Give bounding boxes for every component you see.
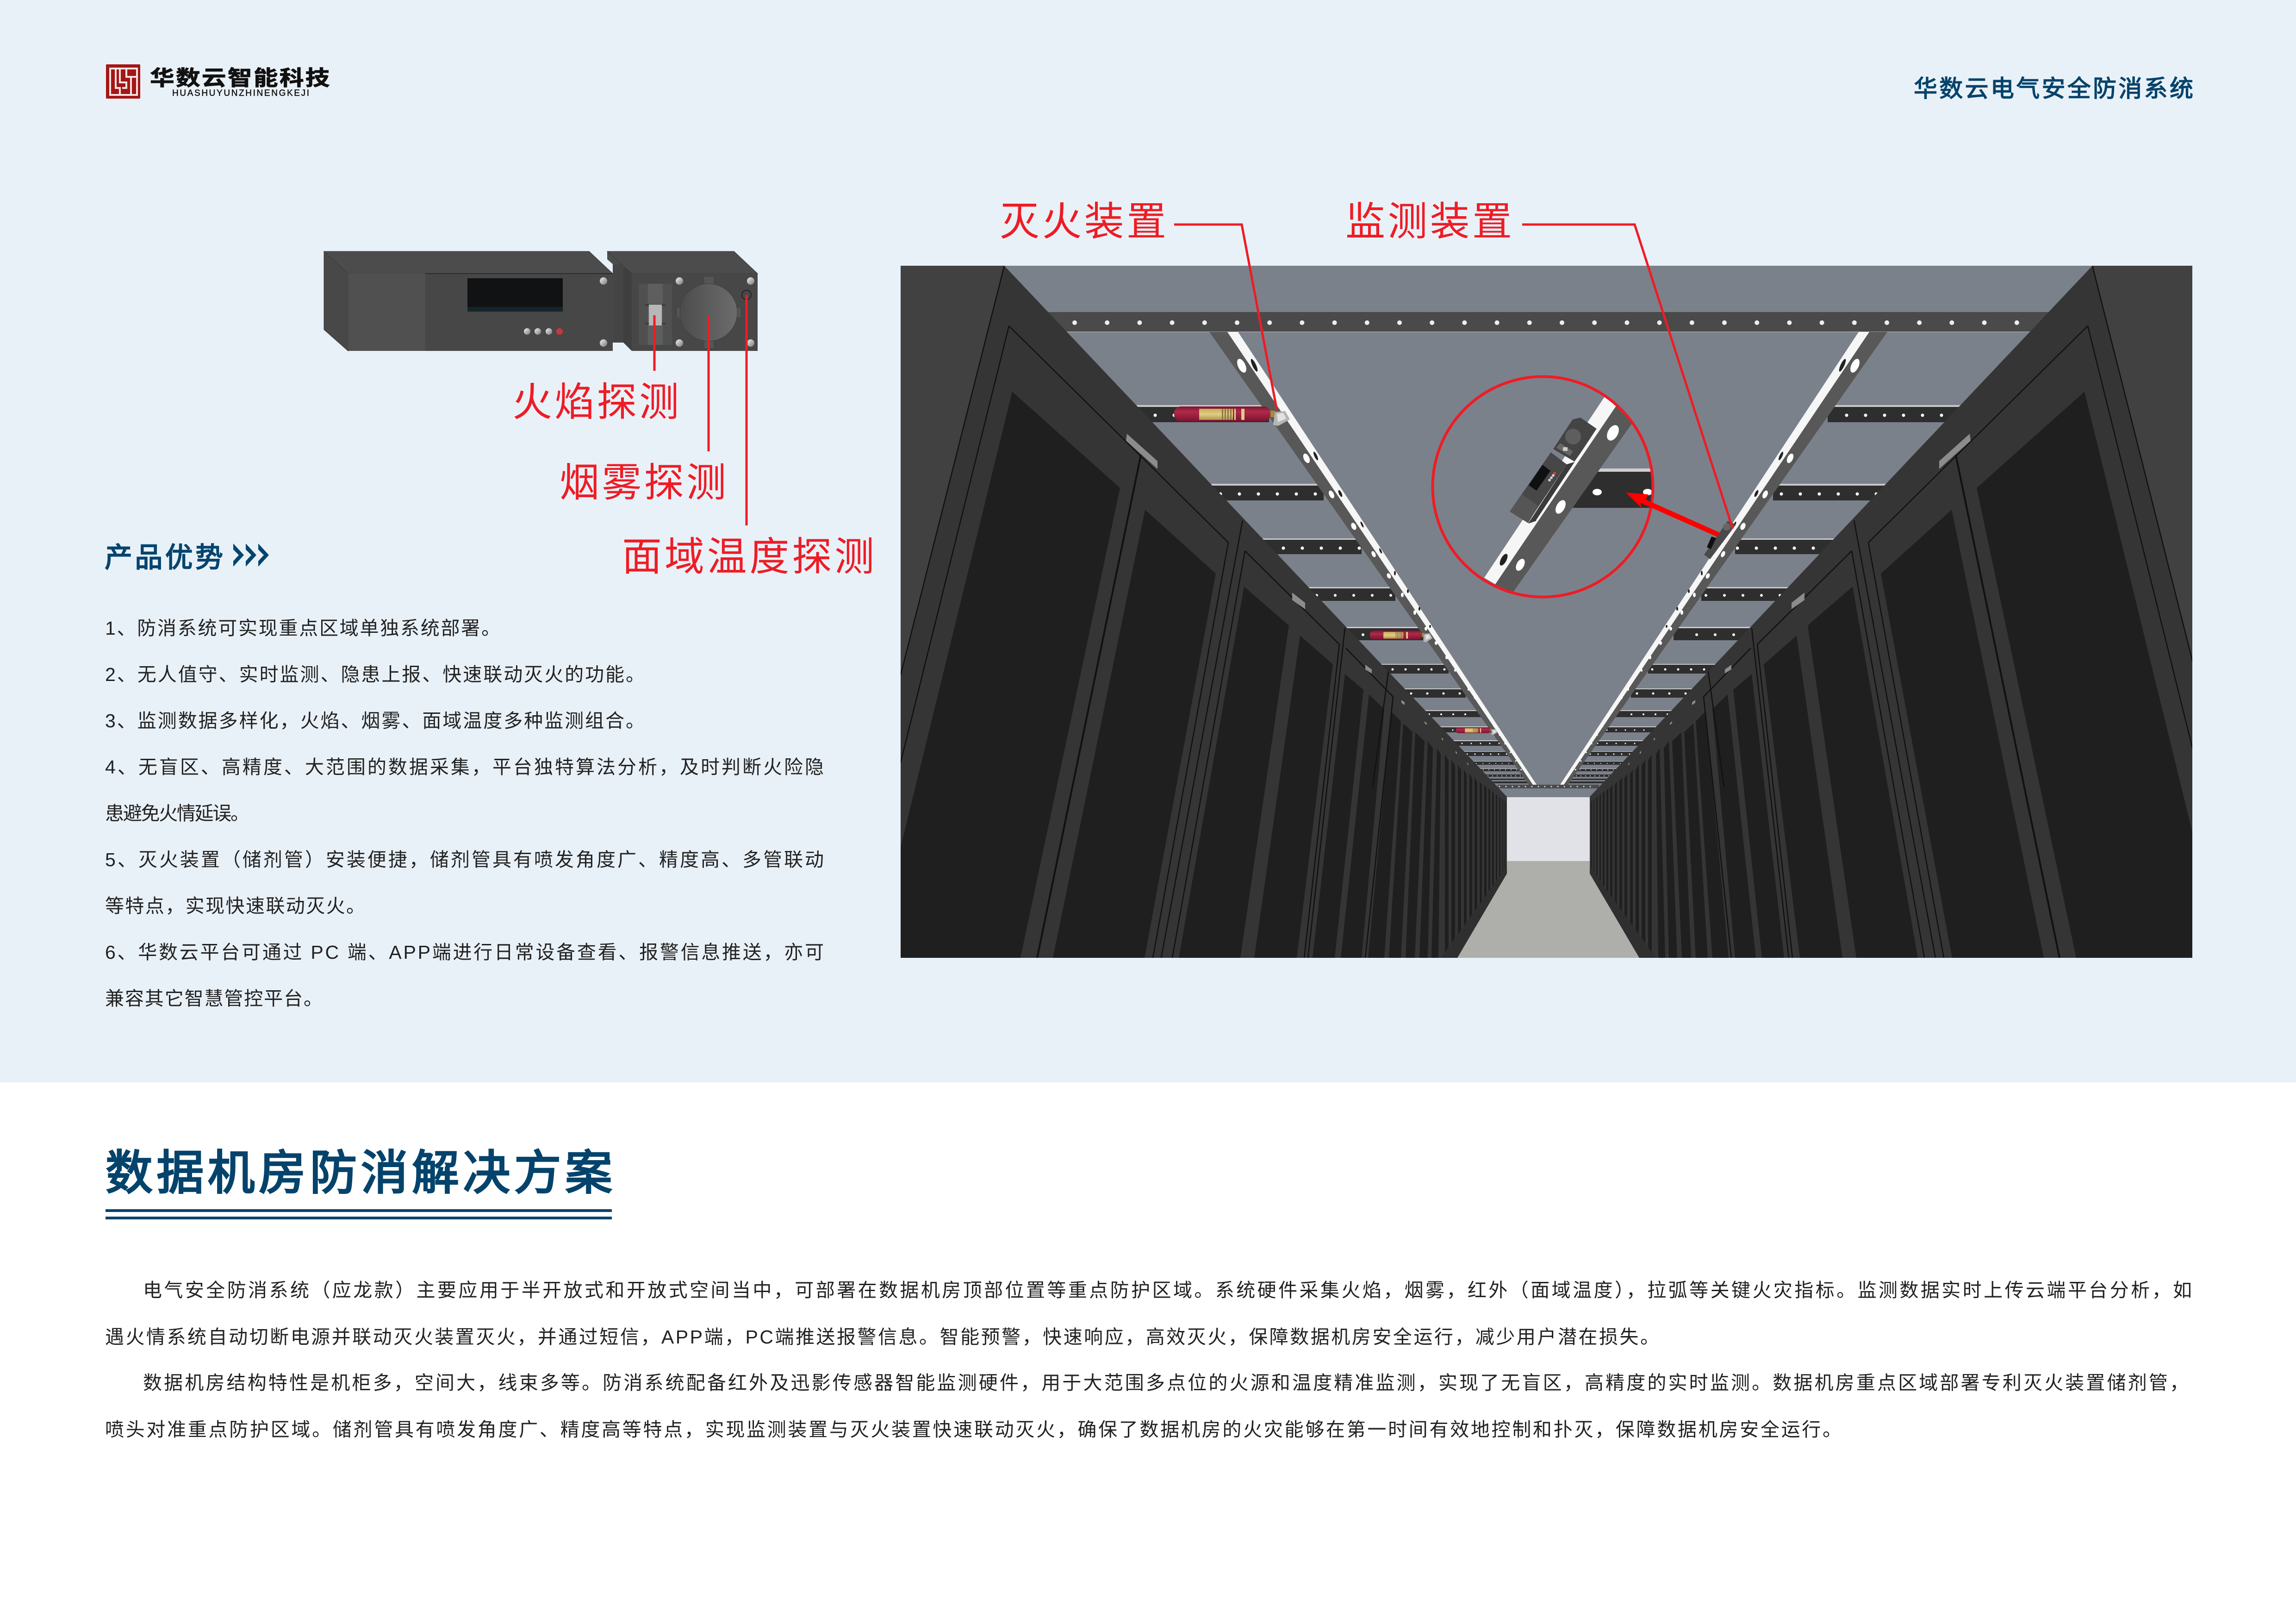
text block: solution description: 电气安全防消系统（应龙款）主要应用于半开放式和开放式空间当中，可部署在数据机房顶部位置等重点防护区域。系统硬件采集火焰，烟雾，红外（面域温度），拉弧等关键火灾指标。监测数据实时上传云端平台分析，如 [143, 1280, 2192, 1301]
extinguisher: middle [1370, 631, 1432, 642]
text block: solution description: 数据机房结构特性是机柜多，空间大，线束多等。防消系统配备红外及迅影传感器智能监测硬件，用于大范围多点位的火源和温度精准监测，实现了无盲区，高精度的实时监测。数据机房重点区域部署专利灭火装置储剂管， [143, 1372, 2189, 1393]
pointer line: flame detection [653, 315, 655, 371]
heading: 产品优势: 产品优势 [105, 542, 223, 573]
text block: solution description: 喷头对准重点防护区域。储剂管具有喷发角度广、精度高等特点，实现监测装置与灭火装置快速联动灭火，确保了数据机房的火灾能够在第一时间有效地控制和扑灭，保障数据机房安全运行。 [105, 1419, 1842, 1440]
magnified view [1430, 375, 1666, 606]
monitoring device on right rail [1704, 521, 1738, 561]
text block: product advantages list: 患避免火情延误。 [105, 803, 249, 824]
floor [1456, 861, 1641, 958]
icon: HS red seal [106, 64, 140, 99]
icon: triple chevron [233, 543, 269, 567]
end wall [1507, 797, 1590, 862]
ceiling [1004, 266, 2092, 797]
callout: 监测装置: 监测装置 [1345, 200, 1512, 244]
heading: system name top right: 华数云电气安全防消系统 [1914, 75, 2193, 102]
text block: product advantages list [105, 618, 824, 1009]
title: 数据机房防消解决方案: 数据机房防消解决方案 [106, 1147, 612, 1199]
pointer line: smoke detection [707, 315, 710, 451]
extinguisher: near [1174, 406, 1290, 426]
text block: product advantages list: 等特点，实现快速联动灭火。 [105, 895, 365, 917]
product illustration: detector box [324, 251, 758, 351]
text block: product advantages list: 2、无人值守、实时监测、隐患上报、快速联动灭火的功能。 [105, 664, 645, 685]
cable tray: far beam [1498, 785, 1599, 788]
text block: product advantages list: 3、监测数据多样化，火焰、烟雾、面域温度多种监测组合。 [105, 710, 645, 731]
sensor box [607, 251, 758, 351]
lower panel background [0, 1082, 2296, 1624]
page background: top section [0, 0, 2296, 1082]
panel: data-center aisle illustration [879, 266, 2217, 958]
label: 烟雾探测: 烟雾探测 [560, 461, 726, 505]
text block: solution description [105, 1280, 2192, 1440]
label: 火焰探测: 火焰探测 [512, 380, 679, 425]
cable tray: rear beam [1037, 312, 2060, 332]
arrow: device to magnifier [1626, 493, 1719, 537]
cable ladder: left run [1064, 332, 1537, 785]
callout: 灭火装置: 灭火装置 [1000, 200, 1166, 244]
text block: solution description: 遇火情系统自动切断电源并联动灭火装置灭火，并通过短信，APP端，PC端推送报警信息。智能预警，快速响应，高效灭火，保障数据机房安全运行，减少用户潜在损失。 [105, 1326, 1659, 1348]
cable ladder: right run [1560, 332, 2032, 785]
connector [607, 251, 632, 351]
extinguisher: far [1456, 727, 1497, 735]
logo: 华数云智能科技 [106, 64, 330, 99]
label: 面域温度探测: 面域温度探测 [622, 535, 874, 579]
server rack row: left [879, 266, 1507, 958]
magnified monitoring device [1510, 418, 1597, 524]
text block: product advantages list: 兼容其它智慧管控平台。 [105, 988, 323, 1009]
text block: product advantages list: 6、华数云平台可通过 PC 端、APP端进行日常设备查看、报警信息推送，亦可 [105, 942, 824, 963]
magnifier callout [1430, 375, 1666, 606]
callout: 灭火装置 [1000, 200, 1277, 410]
text block: product advantages list: 4、无盲区、高精度、大范围的数据采集，平台独特算法分析，及时判断火险隐 [105, 756, 824, 778]
text block: product advantages list: 1、防消系统可实现重点区域单独系统部署。 [105, 618, 500, 639]
callout: 监测装置 [1345, 200, 1733, 529]
server rack row: right [1590, 266, 2217, 958]
logo wordmark: HUASHUYUNZHINENGKEJI [172, 88, 309, 98]
text block: product advantages list: 5、灭火装置（储剂管）安装便捷，储剂管具有喷发角度广、精度高、多管联动 [105, 849, 824, 870]
pointer line: area temperature detection [745, 295, 748, 525]
logo wordmark: 华数云智能科技 [150, 67, 330, 90]
control box [324, 251, 613, 351]
